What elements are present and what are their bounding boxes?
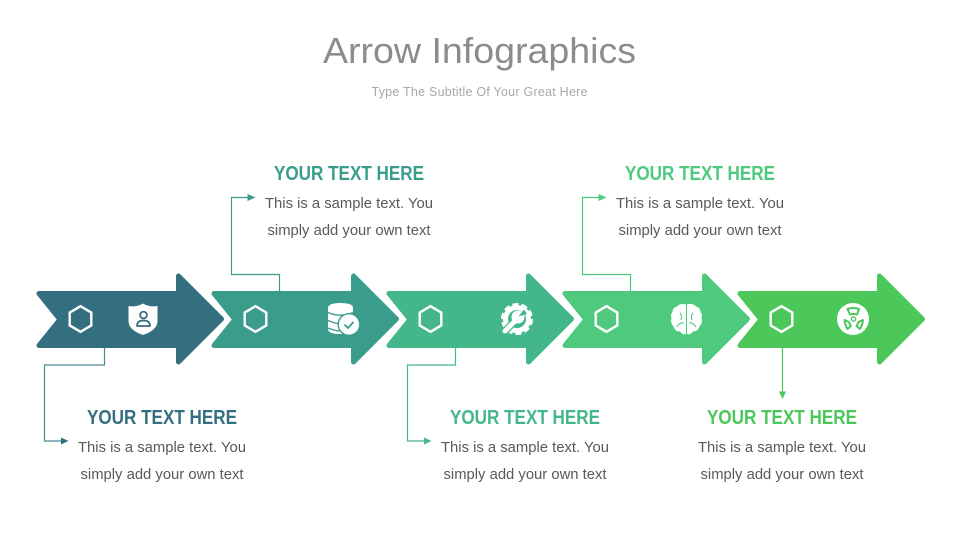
subtitle: Type The Subtitle Of Your Great Here	[372, 85, 588, 99]
icon: hexagon 5	[771, 306, 792, 332]
text block 2: This is a sample text. You	[265, 196, 433, 212]
text block 5: simply add your own text	[700, 467, 864, 483]
text block 2: simply add your own text	[268, 223, 430, 239]
arrow 3	[389, 276, 572, 362]
text block 1: simply add your own text	[80, 467, 244, 483]
text block 5	[698, 407, 866, 483]
text block 3: simply add your own text	[444, 467, 606, 483]
text block 4: simply add your own text	[618, 223, 782, 239]
title: Arrow Infographics	[323, 30, 636, 71]
text block 3: YOUR TEXT HERE	[450, 407, 600, 429]
connector 3	[408, 348, 456, 444]
text block 5: This is a sample text. You	[698, 440, 866, 456]
icon: database with check	[328, 303, 360, 335]
connector 5	[779, 348, 786, 399]
text block 4	[616, 163, 784, 239]
text block 2	[265, 163, 433, 239]
text block 1	[78, 407, 246, 483]
arrow 4	[565, 276, 748, 362]
text block 4: This is a sample text. You	[616, 196, 784, 212]
icon: radiation symbol	[837, 303, 869, 335]
arrow 1	[39, 276, 222, 362]
icon: hexagon 3	[420, 306, 441, 332]
icon: brain	[671, 304, 702, 334]
icon: hexagon 1	[70, 306, 91, 332]
arrow 5	[740, 276, 922, 362]
text block 4: YOUR TEXT HERE	[625, 163, 775, 185]
connector 4	[582, 194, 630, 291]
text block 3: This is a sample text. You	[441, 440, 609, 456]
text block 1: YOUR TEXT HERE	[87, 407, 237, 429]
text block 5: YOUR TEXT HERE	[707, 407, 857, 429]
connector 2	[232, 194, 280, 291]
text block 3	[441, 407, 609, 483]
text block 2: YOUR TEXT HERE	[274, 163, 424, 185]
connector 1	[44, 348, 104, 444]
icon: shield with person	[128, 304, 158, 335]
icon: hexagon 2	[245, 306, 266, 332]
arrow 2	[214, 276, 396, 362]
text block 1: This is a sample text. You	[78, 440, 246, 456]
icon: hexagon 4	[596, 306, 617, 332]
icon: gear with wrench	[502, 304, 532, 334]
